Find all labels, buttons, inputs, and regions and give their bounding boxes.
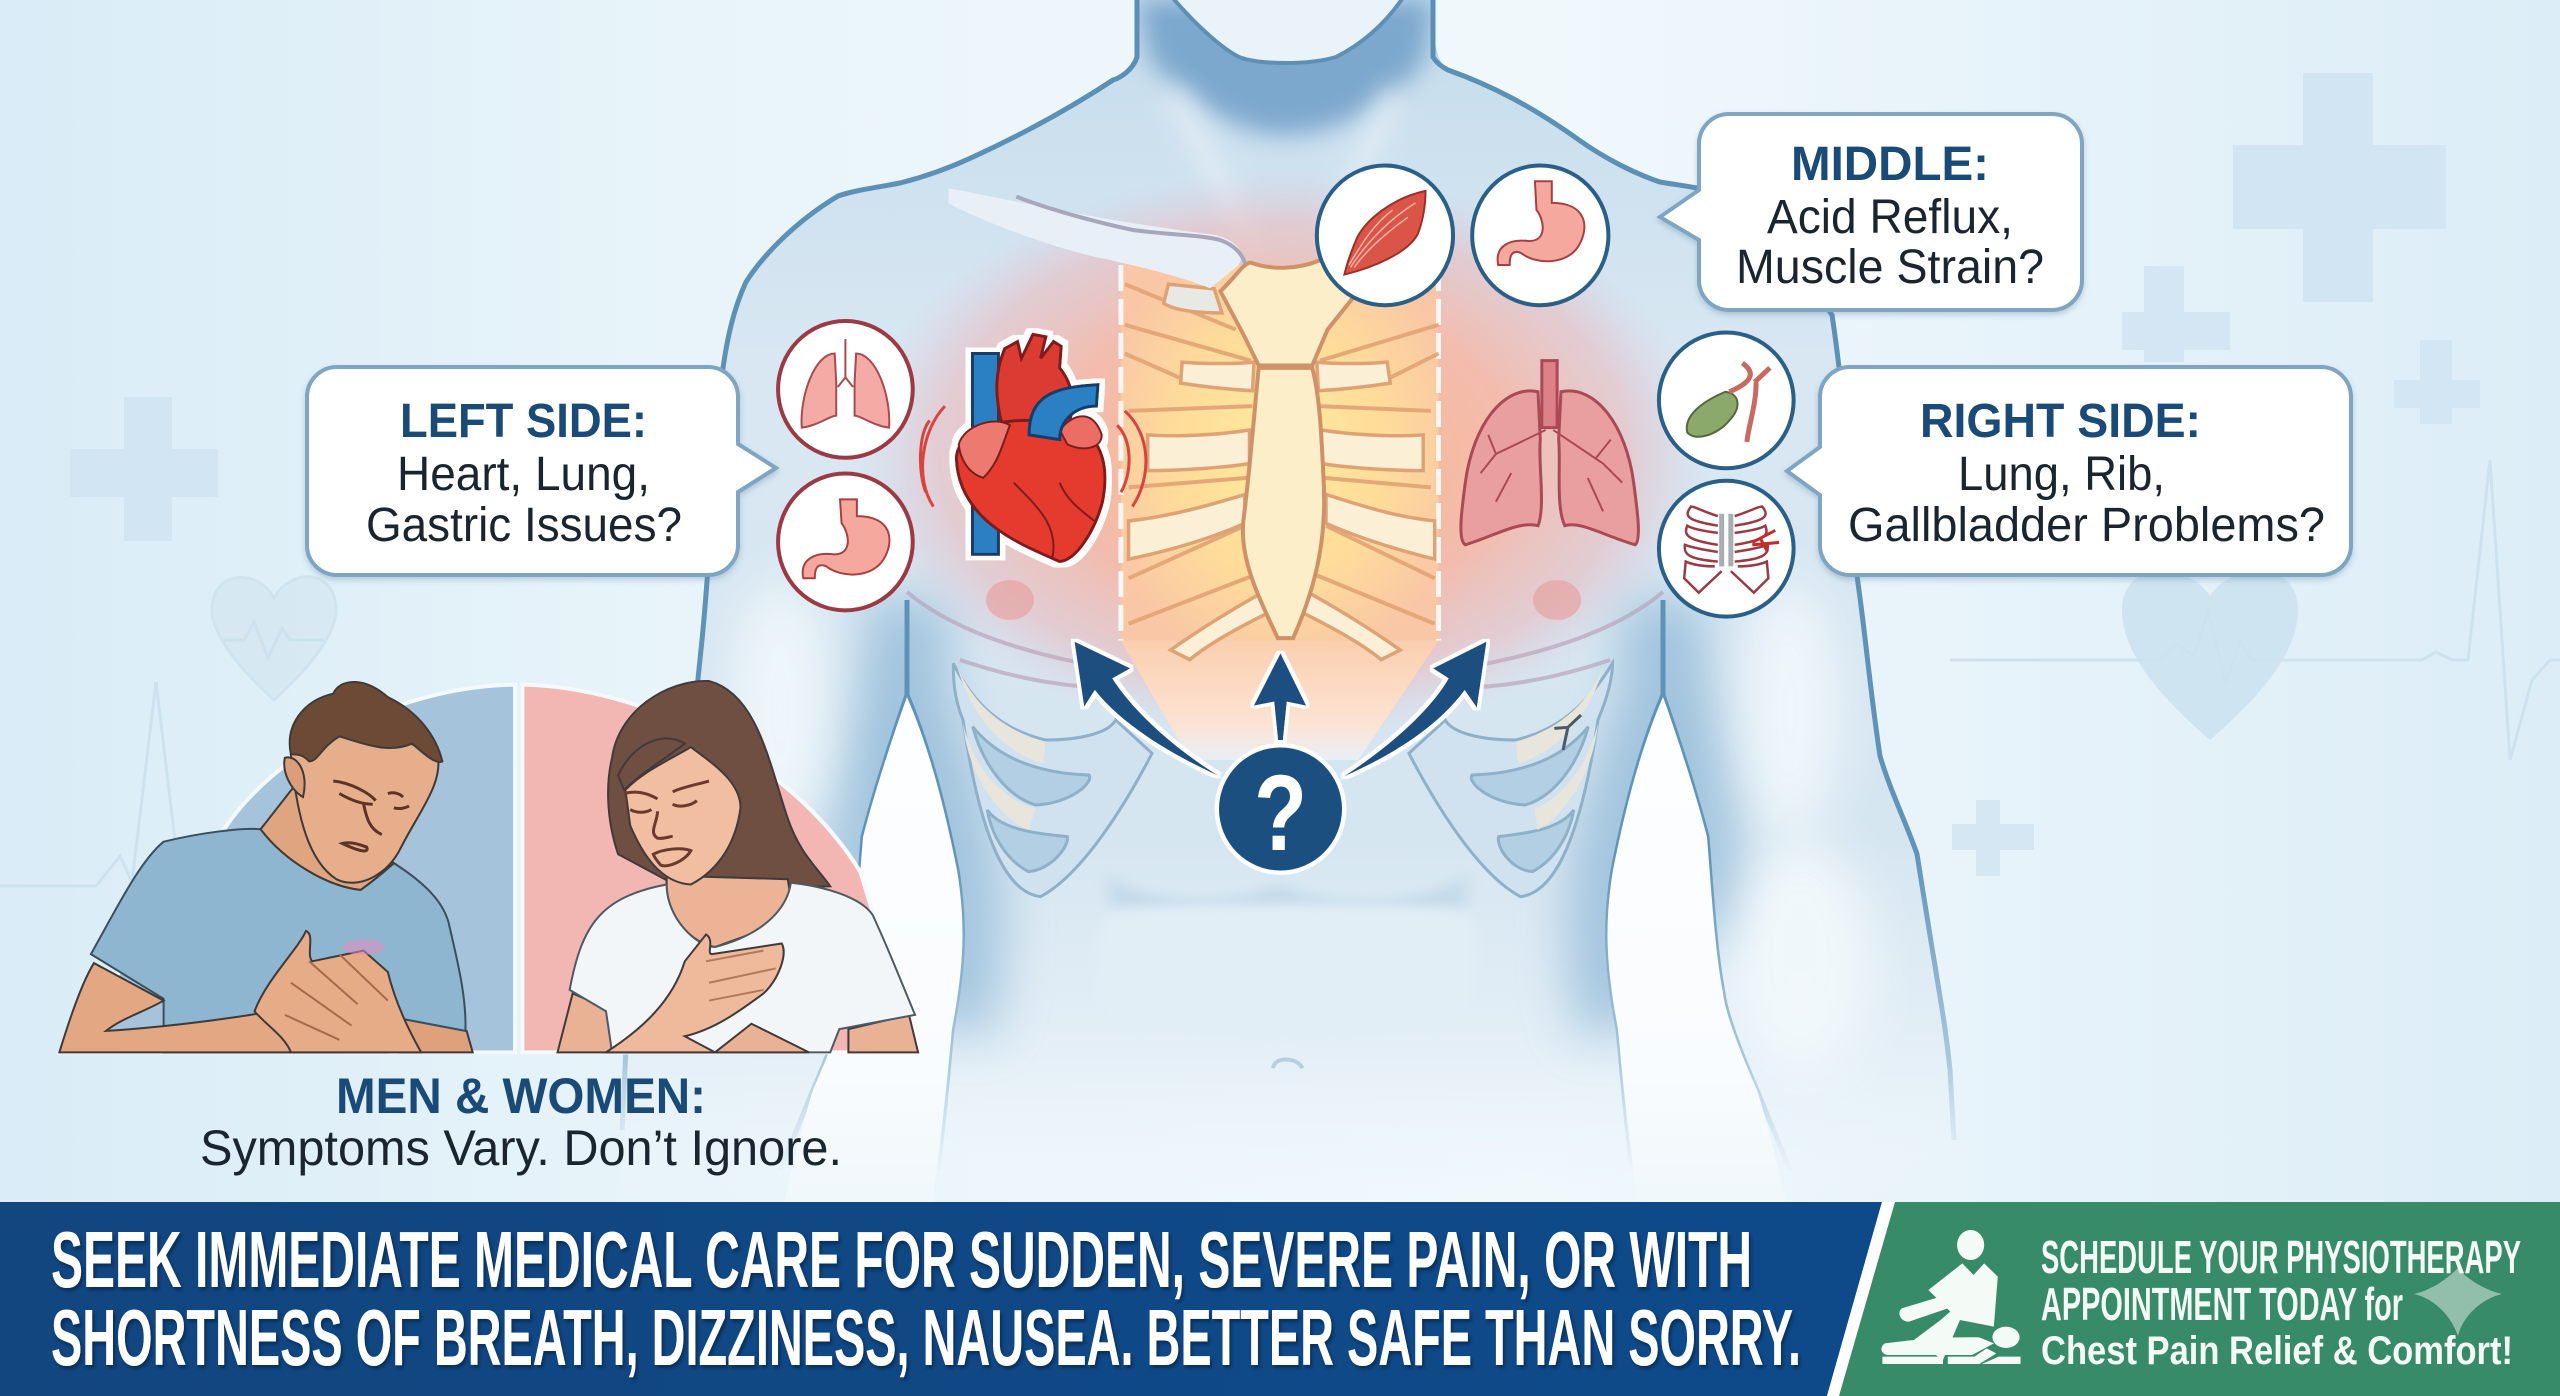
pink half backdrop: [522, 685, 915, 1052]
callout: right side: Gallbladder Problems?: [1848, 499, 2325, 552]
chin: [1171, 0, 1404, 63]
bottom warning banner: [0, 1202, 1895, 1396]
men and women caption: MEN & WOMEN:: [336, 1068, 706, 1124]
lower peach V: [1121, 640, 1439, 760]
callout: left side: Heart, Lung,: [397, 448, 650, 501]
man figure: [59, 682, 473, 1052]
icon: small lungs: [802, 339, 889, 428]
woman figure: [558, 681, 918, 1052]
callout: left side: Gastric Issues?: [366, 499, 682, 552]
blue half backdrop: [61, 685, 515, 1052]
icon: gallbladder: [1687, 363, 1770, 442]
clavicle: [948, 188, 1245, 288]
arrows from question mark: [1074, 642, 1486, 777]
chest anatomy: traced group: [778, 166, 1794, 760]
icon: muscle: [1344, 191, 1426, 275]
question mark circle: ?: [1254, 752, 1307, 873]
callout: middle: Acid Reflux,: [1767, 191, 2013, 244]
icon circles: [778, 166, 1794, 617]
icon: stomach middle: [1498, 181, 1584, 265]
right costal margin: [1409, 663, 1613, 897]
callout: middle: MIDDLE:: [1791, 138, 1989, 191]
gap between right arm and torso: [1608, 600, 1790, 1170]
sternum: [1220, 260, 1354, 638]
ribs right: [1317, 362, 1390, 391]
body shading: [732, 0, 1870, 1080]
callout: left side: LEFT SIDE:: [400, 395, 647, 448]
callout: left side: [307, 367, 776, 575]
chest glow: [887, 191, 1678, 710]
physiotherapy call-to-action panel: [1839, 1202, 2560, 1396]
men and women caption: [200, 1068, 842, 1176]
rib fracture mark: [1554, 715, 1581, 750]
body: translucent torso and arms: [620, 0, 1960, 1220]
thin rib lines: [1125, 284, 1439, 624]
heart pain waves: [920, 406, 1146, 507]
icon: rib cage: [1684, 507, 1779, 593]
heart icon with pain waves: [956, 334, 1105, 562]
icon: physiotherapist treating patient: [1881, 1230, 2021, 1364]
men and women illustration: [59, 681, 918, 1052]
left costal margin: [953, 663, 1152, 897]
icon: stomach left: [803, 499, 889, 578]
lungs large: [1461, 361, 1638, 545]
abdomen shading: [1108, 873, 1467, 907]
lower rib cage and abdomen: [953, 663, 1613, 1068]
question mark circle: [1214, 743, 1346, 875]
decorative medical crosses: [70, 73, 2480, 876]
callout: middle: [1660, 114, 2082, 310]
sparkle: [2414, 1268, 2502, 1336]
callout: right side: [1787, 367, 2351, 575]
ribs left: [1129, 284, 1435, 660]
center chest glow strip: [1121, 265, 1439, 640]
callout: right side: RIGHT SIDE:: [1920, 395, 2201, 448]
men and women caption: Symptoms Vary. Don’t Ignore.: [200, 1120, 842, 1176]
callout: middle: Muscle Strain?: [1736, 241, 2044, 294]
gap between left arm and torso: [780, 600, 962, 1170]
decorative hearts and ECG lines: [0, 460, 2560, 886]
callout: right side: Lung, Rib,: [1958, 448, 2165, 501]
body outline: neck, shoulders, outer arms: [622, 0, 1137, 1130]
